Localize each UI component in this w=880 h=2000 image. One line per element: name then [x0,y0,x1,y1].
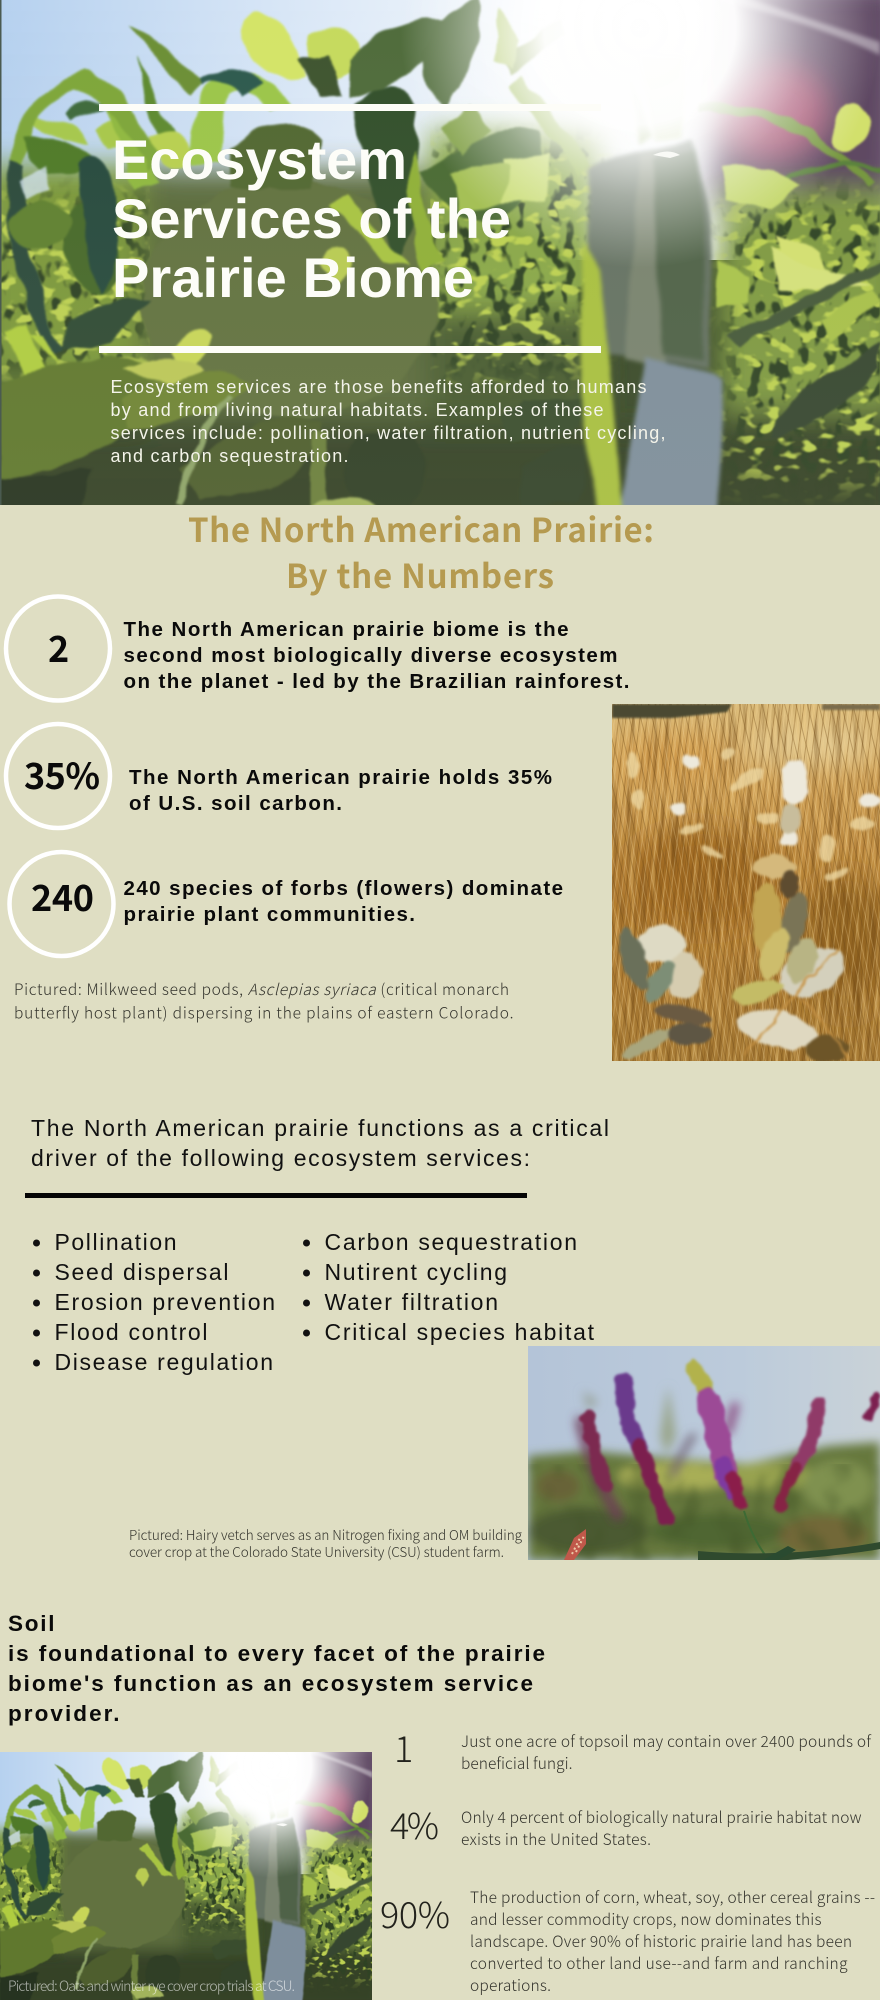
photo: hairy vetch [528,1346,880,1560]
services list column 2 [303,1229,595,1345]
stat text 240: 240 species of forbs (flowers) dominate [124,877,563,900]
title [112,128,511,309]
hero panel [0,0,880,550]
section heading: by the numbers [188,504,654,598]
stat text 2: The North American prairie biome is the [124,618,568,641]
stat circle 2: 2 [48,621,69,673]
caption: oats: Pictured: Oats and winter rye cover crop trials at CSU. [8,1976,295,1996]
title: Services of the [112,187,511,250]
services list column 1: Erosion prevention [54,1289,275,1315]
photo: milkweed seed pods [612,704,880,1061]
soil stat: 1 [394,1721,872,1774]
services list column 1: Flood control [54,1319,208,1345]
bottom white rule [99,346,601,353]
hero photo: cover crop against the sun [0,0,880,550]
soil statement: Soil [8,1611,54,1636]
stat text 35% [129,766,552,815]
text for 90%: landscape. Over 90% of historic prairie land has been [470,1930,852,1952]
section heading: by the numbers: The North American Prairie: [188,504,654,552]
text for 1: beneficial fungi. [461,1752,572,1774]
text for 90%: and lesser commodity crops, now dominates this [470,1908,822,1930]
soil stat: 90% [380,1886,875,1996]
services list column 2: Critical species habitat [324,1319,595,1345]
section heading: by the numbers: By the Numbers [286,550,554,598]
services list column 1: Pollination [54,1229,176,1255]
intro paragraph: by and from living natural habitats. Examples of these [110,400,604,420]
soil statement: provider. [8,1701,120,1726]
stat text 35%: of U.S. soil carbon. [129,792,342,815]
stat circle 35%: 35% [24,748,100,800]
text for 4% [461,1806,862,1850]
stat text 240: prairie plant communities. [124,903,415,926]
text for 90%: operations. [470,1974,551,1996]
stat text 35%: The North American prairie holds 35% [129,766,552,789]
stat: 240 [10,852,563,956]
text for 1 [461,1730,872,1774]
text for 90% [470,1886,875,1996]
stat text 2: on the planet - led by the Brazilian rainforest. [124,670,630,693]
intro paragraph: and carbon sequestration. [110,446,348,466]
stat circle 2 [6,596,110,700]
stat circle 240 [10,852,114,956]
number 1: 1 [394,1721,413,1773]
services list column 1: Disease regulation [54,1349,273,1375]
services intro text: The North American prairie functions as a critical [31,1115,609,1141]
caption: vetch [129,1524,523,1561]
number 4%: 4% [390,1798,439,1850]
services list column 1 [33,1229,275,1375]
services list column 2: Nutirent cycling [324,1259,507,1285]
black rule [25,1193,527,1198]
photo: oats and rye cover crop with caption [0,1752,372,2000]
stat circle 35% [6,724,110,828]
intro paragraph [110,377,666,466]
text for 90%: The production of corn, wheat, soy, other cereal grains -- [470,1886,875,1908]
caption: vetch: cover crop at the Colorado State University (CSU) student farm. [129,1541,504,1561]
text for 4%: exists in the United States. [461,1828,651,1850]
soil stat: 4% [390,1798,862,1850]
stat text 2 [124,618,630,693]
top white rule [99,104,601,111]
services intro text [31,1115,609,1171]
services intro text: driver of the following ecosystem services: [31,1145,530,1171]
stat: 35% [6,724,552,828]
caption: vetch: Pictured: Hairy vetch serves as an Nitrogen fixing and OM building [129,1524,523,1544]
services list column 2: Carbon sequestration [324,1229,577,1255]
caption: milkweed [14,978,514,1024]
stat circle 240: 240 [31,870,94,922]
stat: 2 [6,596,630,700]
soil statement [8,1611,545,1726]
title: Ecosystem [112,128,407,191]
stat text 240 [124,877,563,926]
text for 4%: Only 4 percent of biologically natural prairie habitat now [461,1806,862,1828]
title: Prairie Biome [112,246,474,309]
text for 90%: converted to other land use--and farm and ranching [470,1952,848,1974]
caption: milkweed: Pictured: Milkweed seed pods, Asclepias syriaca (critical monarch [14,978,509,1000]
services list column 2: Water filtration [324,1289,498,1315]
intro paragraph: services include: pollination, water filtration, nutrient cycling, [110,423,666,443]
services list column 1: Seed dispersal [54,1259,228,1285]
intro paragraph: Ecosystem services are those benefits afforded to humans [110,377,647,397]
caption: milkweed: butterfly host plant) dispersing in the plains of eastern Colorado. [14,1002,514,1024]
soil statement: is foundational to every facet of the prairie [8,1641,545,1666]
number 90%: 90% [380,1887,450,1939]
soil statement: biome's function as an ecosystem service [8,1671,533,1696]
stat text 2: second most biologically diverse ecosystem [124,644,618,667]
text for 1: Just one acre of topsoil may contain over 2400 pounds of [461,1730,872,1752]
